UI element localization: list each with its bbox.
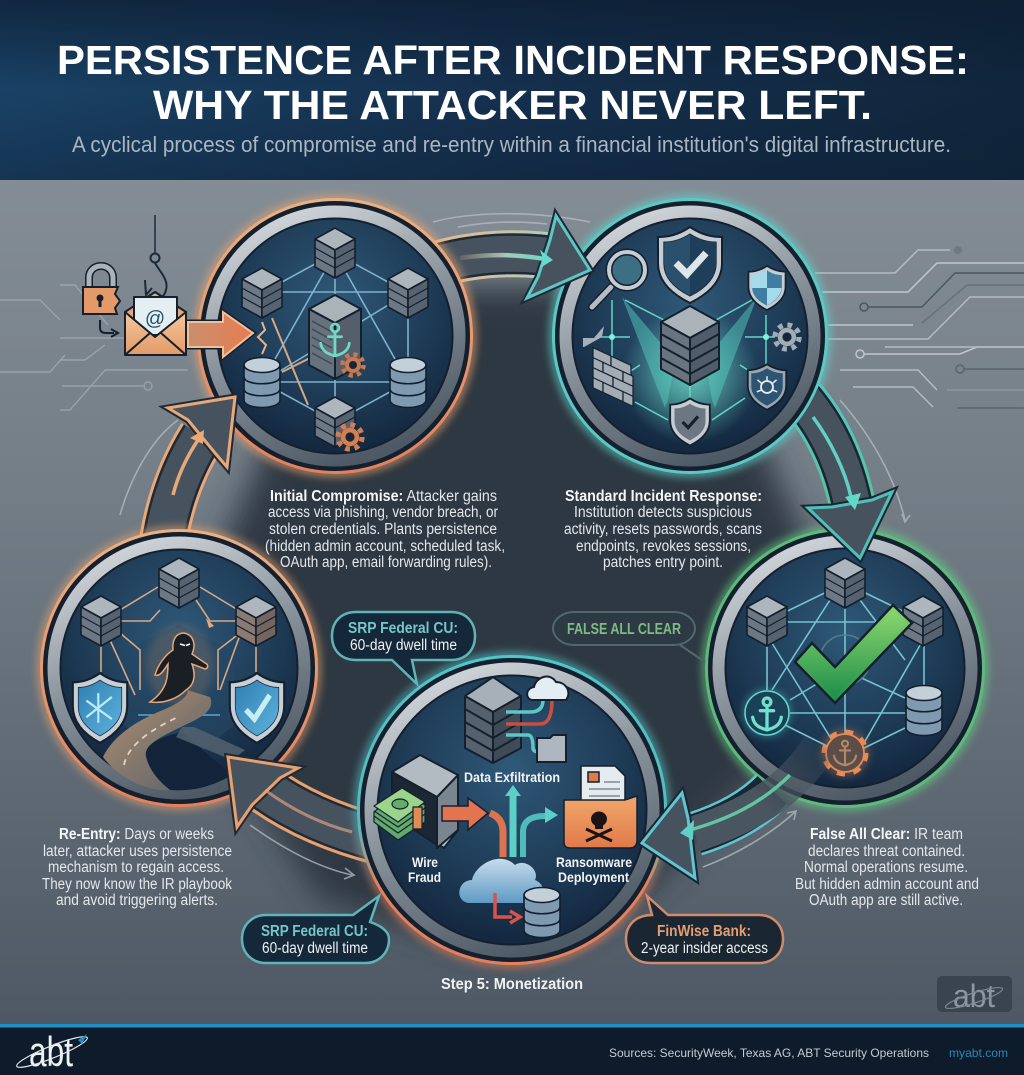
text: re-entry: They now know the IR playbook xyxy=(42,876,232,893)
step 3 circle: false all clear xyxy=(706,529,984,807)
icon: large shield with check xyxy=(658,227,722,303)
icon: stack of money xyxy=(374,788,425,840)
red arrow to database xyxy=(495,893,520,923)
step 5 caption: Step 5: Monetization xyxy=(441,976,583,993)
text: initial compromise: stolen credentials. Plants persistence xyxy=(269,521,497,538)
icon: green check xyxy=(795,605,912,703)
icon: left shield xyxy=(73,673,127,743)
circuit traces right xyxy=(815,246,1024,408)
icon: gears xyxy=(338,354,364,449)
arrow: initial compromise to incident response xyxy=(425,216,590,298)
icon: file folder xyxy=(537,735,566,762)
footer logo: abt xyxy=(29,1028,73,1075)
icon: cloud top xyxy=(527,677,568,700)
watermark logo: abt xyxy=(953,978,995,1014)
icon: bottom shield with check xyxy=(670,398,710,446)
icon: vault xyxy=(392,755,458,848)
icon: servers xyxy=(242,228,428,447)
icon: ransomware folder xyxy=(564,796,637,848)
text: standard incident response: Institution detects suspicious xyxy=(574,504,752,521)
label: ransomware deployment: Deployment xyxy=(558,869,629,885)
arrow: incident response to false all clear xyxy=(790,385,892,558)
website: myabt.com xyxy=(949,1046,1008,1060)
icon: ghost intruder xyxy=(146,625,214,705)
arrow: false all clear to monetization xyxy=(642,745,820,878)
icon: databases xyxy=(244,358,426,408)
callout: false all clear tag xyxy=(553,612,705,662)
callout: SRP Federal CU top: SRP Federal CU: xyxy=(348,620,458,637)
text: re-entry: and avoid triggering alerts. xyxy=(56,892,218,909)
step 1 circle: initial compromise xyxy=(198,199,472,473)
thin motion arrows xyxy=(120,214,910,879)
icon: ransom document xyxy=(581,766,625,805)
callout: SRP Federal CU bottom xyxy=(242,896,389,963)
icon: brick wall xyxy=(593,348,633,406)
flow curves xyxy=(490,785,558,857)
arrow: re-entry to initial compromise xyxy=(161,397,235,560)
icon: anchor xyxy=(321,324,349,356)
label: data exfiltration: Data Exfiltration xyxy=(464,769,560,785)
text: initial compromise xyxy=(265,488,505,571)
watermark logo xyxy=(937,976,1012,1014)
callout: FinWise Bank: 2-year insider access xyxy=(641,940,768,957)
text: false all clear: Normal operations resume. xyxy=(804,859,968,876)
text: re-entry: Re-Entry: Days or weeks xyxy=(59,826,214,843)
icon: central compromised server xyxy=(309,295,361,379)
icon: small cloud glyph xyxy=(583,326,604,347)
text: initial compromise: (hidden admin account, scheduled task, xyxy=(265,538,505,555)
icon: phishing envelope: @ xyxy=(145,308,165,330)
icon: padlock xyxy=(83,266,120,314)
breach mark xyxy=(258,322,266,354)
network lines xyxy=(262,253,408,422)
callout: SRP Federal CU top xyxy=(332,612,475,684)
arrow: monetization to re-entry xyxy=(228,757,380,840)
arrow: wire fraud outflow xyxy=(442,798,488,830)
icon: gear xyxy=(775,325,799,349)
icon: database xyxy=(524,888,560,938)
arrow: phishing into network xyxy=(188,312,253,357)
step 2 circle: standard incident response xyxy=(553,199,827,473)
text: false all clear: declares threat contained. xyxy=(808,843,965,860)
callout: SRP Federal CU top: 60-day dwell time xyxy=(350,637,457,654)
label: ransomware deployment: Ransomware xyxy=(556,854,632,870)
circuit traces left xyxy=(0,285,188,410)
icon: lower cloud xyxy=(459,859,544,903)
icon: right shield xyxy=(230,673,284,743)
data pipes xyxy=(506,700,552,752)
header band xyxy=(0,0,1024,180)
text: false all clear xyxy=(795,826,979,909)
text: false all clear: OAuth app are still active. xyxy=(809,892,963,909)
icon: orange gear anchor xyxy=(821,729,869,777)
road xyxy=(103,690,211,790)
icon: fish hook xyxy=(145,215,167,300)
text: false all clear: False All Clear: IR team xyxy=(810,826,963,843)
text: re-entry: later, attacker uses persistence xyxy=(43,843,232,860)
icon: central server stack xyxy=(661,306,719,385)
title: WHY THE ATTACKER NEVER LEFT. xyxy=(153,82,872,128)
hexagon inner shade xyxy=(118,625,240,770)
icon: exfiltration server xyxy=(465,677,521,763)
callout: SRP Federal CU bottom: SRP Federal CU: xyxy=(261,923,368,940)
subtitle: A cyclical process of compromise and re-entry within a financial institution's digital infrastructure. xyxy=(72,132,951,157)
dark lower pocket xyxy=(146,732,232,790)
text: re-entry: mechanism to regain access. xyxy=(48,859,224,876)
text: standard incident response: Standard Incident Response: xyxy=(565,488,762,505)
network lines xyxy=(767,583,924,750)
text: re-entry xyxy=(42,826,232,909)
text: standard incident response: activity, resets passwords, scans xyxy=(564,521,762,538)
icon: phishing envelope xyxy=(125,292,186,355)
callout: SRP Federal CU bottom: 60-day dwell time xyxy=(262,940,368,957)
network lines xyxy=(101,587,256,715)
icon: servers xyxy=(747,558,943,646)
text: standard incident response xyxy=(564,488,762,571)
icon: teal anchor badge xyxy=(743,689,791,737)
text: standard incident response: patches entry point. xyxy=(603,554,723,571)
icon: small redirect arrow xyxy=(100,320,118,337)
title xyxy=(57,37,969,128)
text: initial compromise: OAuth app, email forwarding rules). xyxy=(280,554,492,571)
step 5 circle: monetization xyxy=(358,656,666,964)
dark centre shading xyxy=(170,285,865,960)
label: wire fraud: Wire xyxy=(412,854,438,870)
label: ransomware deployment xyxy=(556,854,632,885)
icon: database xyxy=(906,686,942,736)
teal beams xyxy=(595,297,775,443)
text: initial compromise: access via phishing, vendor breach, or xyxy=(268,504,498,521)
callout: false all clear tag: FALSE ALL CLEAR xyxy=(567,621,681,638)
footer band xyxy=(0,1024,1024,1075)
sources line: Sources: SecurityWeek, Texas AG, ABT Security Operations xyxy=(609,1046,929,1060)
icon: servers xyxy=(81,558,276,646)
label: wire fraud: Fraud xyxy=(408,869,441,885)
callout: FinWise Bank: FinWise Bank: xyxy=(657,923,751,940)
text: initial compromise: Initial Compromise: Attacker gains xyxy=(270,488,497,505)
icon: small checkered shield xyxy=(748,266,786,310)
title: PERSISTENCE AFTER INCIDENT RESPONSE: xyxy=(57,37,969,83)
text: false all clear: But hidden admin account and xyxy=(795,876,979,893)
text: standard incident response: endpoints, revokes sessions, xyxy=(576,538,751,555)
step 4 circle: re-entry xyxy=(41,530,317,806)
callout: FinWise Bank xyxy=(626,896,783,963)
icon: magnifying glass xyxy=(592,252,645,307)
label: wire fraud xyxy=(408,854,441,885)
dark side path xyxy=(176,727,245,760)
icon: bug shield xyxy=(748,364,786,410)
